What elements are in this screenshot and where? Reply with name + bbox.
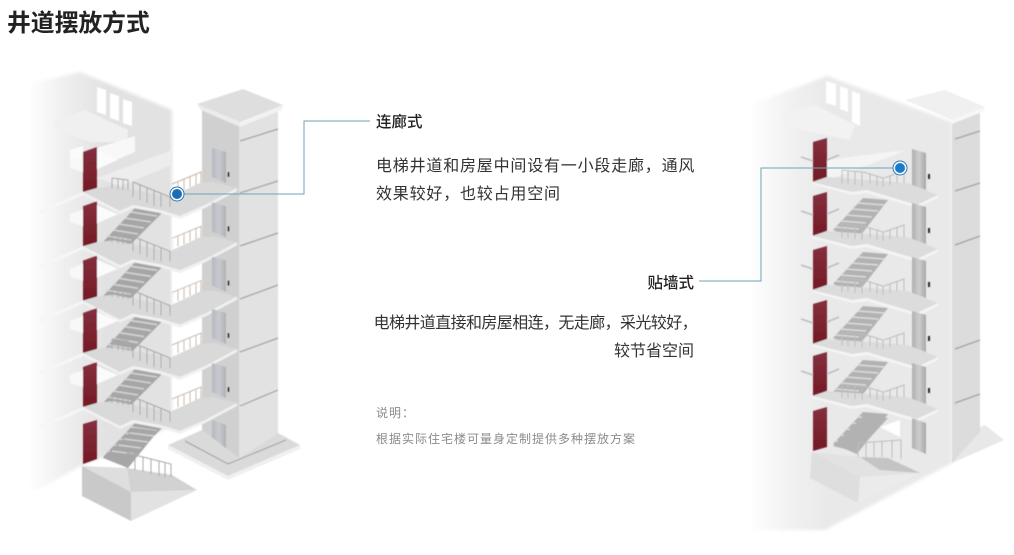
heading: wall-attached type: 贴墙式 [647,275,694,292]
title: 井道摆放方式 [7,10,150,37]
tower side face [952,113,980,463]
tower panel lines [955,131,980,403]
upper windows [826,81,860,126]
text: corridor type description: 效果较好，也较占用空间 [376,186,561,203]
upper room furniture [780,105,855,140]
text: corridor type description [376,157,695,203]
illustration: right building (wall-attached type) [752,76,1004,530]
tower pit base [168,430,300,480]
ground landing block and steps [810,440,920,503]
tower panel lines [240,129,278,406]
upper windows [97,87,132,126]
storeys [801,138,938,454]
note text: 根据实际住宅楼可量身定制提供多种摆放方案 [376,432,636,446]
back wall [28,72,172,490]
lowest door and stair [83,420,97,464]
text: wall-attached type description [374,314,697,360]
tower faces [202,106,239,458]
callout: wall-attached type leader line and marker [699,161,907,281]
back wall and ground [752,76,952,530]
text: corridor type description: 电梯井道和房屋中间设有一小段走廊，通风 [376,158,695,175]
tower cap [905,90,985,124]
illustration: left building (corridor type) [28,72,300,521]
text: wall-attached type description: 较节省空间 [614,343,694,360]
ground landing block and steps [82,453,197,521]
callout: corridor type leader line and marker [170,121,370,201]
upper room furniture [52,110,172,186]
text: wall-attached type description: 电梯井道直接和房屋相连，无走廊，采光较好， [374,315,697,332]
note label: 说明： [376,406,415,420]
storeys [40,147,237,468]
lowest door [813,407,827,451]
tower cap [197,89,283,127]
heading: corridor type: 连廊式 [376,114,423,131]
